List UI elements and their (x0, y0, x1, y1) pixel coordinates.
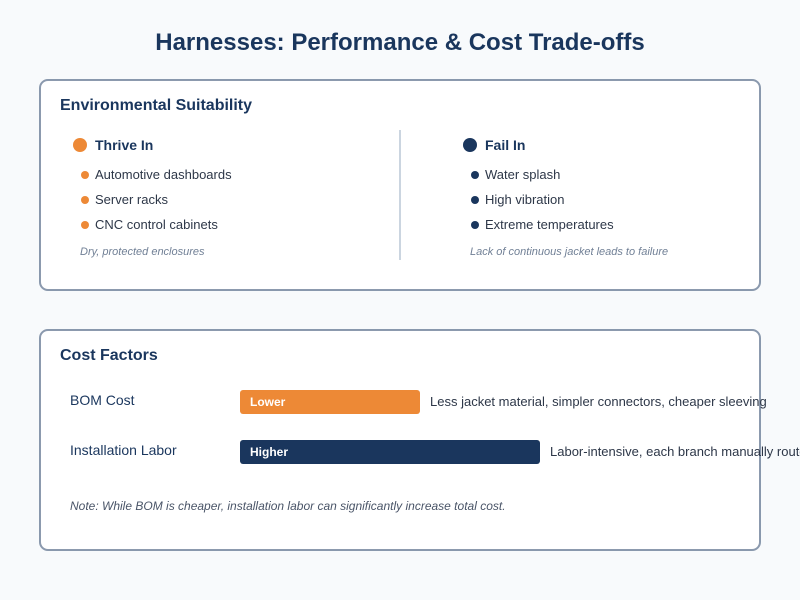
list item: water splash: Water splash (485, 167, 560, 182)
heading: fail in: Fail In (485, 137, 525, 153)
bar: lower (240, 390, 420, 414)
panel: environmental suitability (40, 80, 760, 290)
list item: extreme temperatures: Extreme temperatures (485, 217, 614, 232)
column: fail in (463, 137, 668, 258)
label: installation labor: Installation Labor (70, 442, 177, 458)
title: Harnesses: Performance & Cost Trade-offs (155, 29, 645, 56)
bar: lower: Lower (250, 395, 286, 409)
bar: higher: Higher (250, 445, 288, 459)
panel: cost factors (40, 330, 800, 550)
label: BOM cost: BOM Cost (70, 392, 135, 408)
note: failure cause: Lack of continuous jacket leads to failure (470, 246, 668, 258)
list item: server racks: Server racks (95, 192, 168, 207)
heading: environmental suitability: Environmental Suitability (60, 97, 252, 114)
description: BOM cost: Less jacket material, simpler connectors, cheaper sleeving (430, 394, 767, 409)
row: installation labor (70, 440, 800, 464)
list item: CNC control cabinets: CNC control cabinets (95, 217, 218, 232)
icon: fail marker (463, 138, 477, 152)
heading: thrive in: Thrive In (95, 137, 153, 153)
bar: higher (240, 440, 540, 464)
column: thrive in (73, 137, 232, 258)
note: total cost: Note: While BOM is cheaper, installation labor can significantly increase total cost. (70, 499, 506, 513)
note: thrive conditions: Dry, protected enclosures (80, 246, 205, 258)
row: BOM cost (70, 390, 767, 414)
heading: cost factors: Cost Factors (60, 347, 158, 364)
list item: high vibration: High vibration (485, 192, 564, 207)
icon: thrive marker (73, 138, 87, 152)
list item: automotive dashboards: Automotive dashboards (95, 167, 232, 182)
